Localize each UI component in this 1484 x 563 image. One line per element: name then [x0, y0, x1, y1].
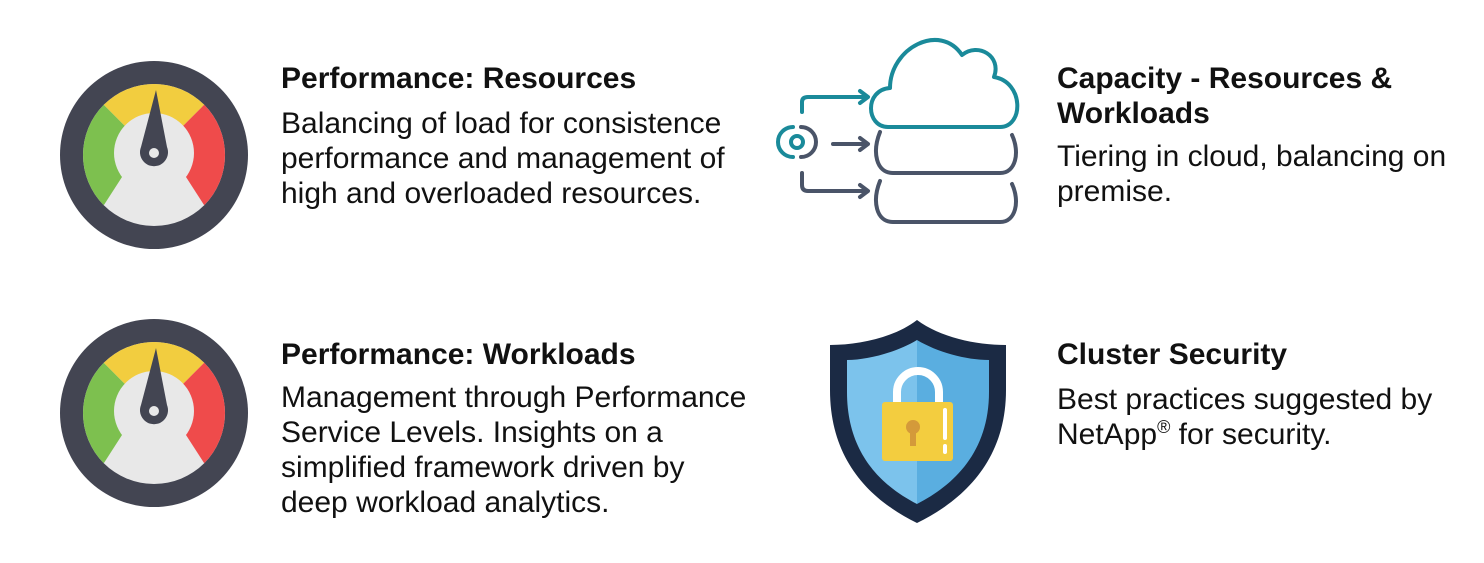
- text: capacity: Capacity - Resources &: [1057, 62, 1392, 95]
- text: cluster security: [1057, 338, 1432, 451]
- text: performance workloads: deep workload analytics.: [281, 486, 610, 519]
- text: capacity: premise.: [1057, 175, 1172, 208]
- text: capacity: [1057, 62, 1446, 208]
- icon: gauge bottom: [60, 319, 248, 507]
- text: performance resources: Balancing of load for consistence: [281, 107, 721, 140]
- text: capacity: Tiering in cloud, balancing on: [1057, 140, 1446, 173]
- text: performance workloads: [281, 338, 746, 519]
- text: performance resources: performance and management of: [281, 142, 725, 175]
- text: performance resources: [281, 62, 725, 210]
- text: capacity: Workloads: [1057, 97, 1210, 130]
- text: performance workloads: Service Levels. Insights on a: [281, 416, 663, 449]
- icon: gauge top: [60, 61, 248, 249]
- text: performance workloads: Management through Performance: [281, 381, 746, 414]
- text: cluster security: NetApp® for security.: [1057, 417, 1332, 451]
- text: performance workloads: simplified framework driven by: [281, 451, 684, 484]
- text: cluster security: Cluster Security: [1057, 338, 1287, 371]
- icon: shield lock: [830, 320, 1006, 523]
- text: performance resources: Performance: Resources: [281, 62, 636, 95]
- icon: cloud tiering: [778, 40, 1017, 222]
- text: performance workloads: Performance: Workloads: [281, 338, 636, 371]
- text: cluster security: Best practices suggested by: [1057, 383, 1432, 416]
- text: performance resources: high and overloaded resources.: [281, 177, 701, 210]
